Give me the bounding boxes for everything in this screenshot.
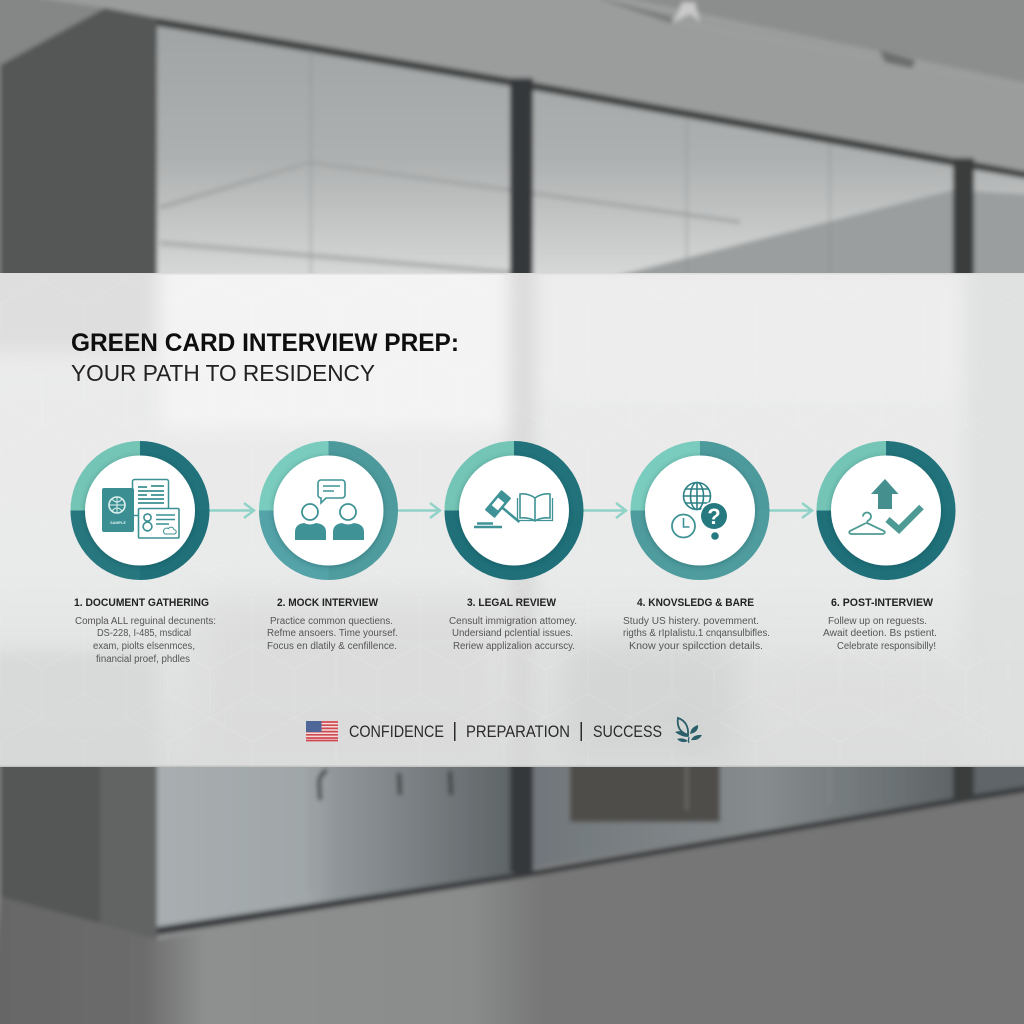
step 1 text: DS-228, I-485, msdical xyxy=(97,628,191,639)
step 1 text xyxy=(74,597,216,665)
step 5 text: Celebrate responsibilly! xyxy=(837,641,936,652)
panel: step 5 post-interview xyxy=(823,448,948,652)
step 5 text: Follew up on reguests. xyxy=(828,616,927,627)
step 4 text xyxy=(623,597,770,652)
step 1 text: 1. DOCUMENT GATHERING xyxy=(74,597,209,609)
step 2 text: 2. MOCK INTERVIEW xyxy=(277,597,379,609)
title: YOUR PATH TO RESIDENCY xyxy=(71,360,375,386)
step 3 text: Undersiand pclential issues. xyxy=(452,628,573,639)
step 5 text xyxy=(823,597,937,652)
panel: translucent white band xyxy=(0,250,1024,780)
ring 3 xyxy=(452,448,576,572)
title: GREEN CARD INTERVIEW PREP: xyxy=(71,329,459,357)
step 3 text: Censult immigration attomey. xyxy=(449,616,577,627)
step 4 text: 4. KNOVSLEDG & BARE xyxy=(637,597,754,609)
icon: globe clock question xyxy=(672,482,728,540)
step 2 text: Refme ansoers. Time yoursef. xyxy=(267,628,398,639)
step 3 text xyxy=(449,597,577,652)
panel: step 2 mock interview xyxy=(266,448,398,652)
title xyxy=(71,329,459,386)
arrow: step 2 to 3 xyxy=(398,503,440,518)
panel: step 4 knowledge xyxy=(623,448,770,652)
icon: globe clock question: ? xyxy=(707,504,721,529)
ring 1 xyxy=(78,448,202,572)
step 4 text: Know your spilcction details. xyxy=(629,641,763,652)
ring 2 xyxy=(266,448,390,572)
step 4 text: Study US histery. povemment. xyxy=(623,616,759,627)
icon: two people talking xyxy=(295,480,364,540)
icon: gavel and book xyxy=(474,490,552,532)
step 5 text: Await deetion. Bs pstient. xyxy=(823,628,937,639)
step 1 text: exam, piolts elsenmces, xyxy=(93,641,195,652)
arrow: step 1 to 2 xyxy=(209,503,254,518)
icon: US flag xyxy=(306,721,338,741)
ring 4 xyxy=(638,448,762,572)
step 3 text: 3. LEGAL REVIEW xyxy=(467,597,557,609)
panel: step 3 legal review xyxy=(449,448,577,652)
step 3 text: Reriew applizalion accurscy. xyxy=(453,641,575,652)
step 4 text: rigths & rIpIalistu.1 cnqansulbifles. xyxy=(623,628,770,639)
step 1 text: financial proef, phdles xyxy=(96,654,190,665)
step 2 text xyxy=(267,597,398,652)
tagline text: CONFIDENCE xyxy=(349,723,444,741)
footer tagline xyxy=(306,695,720,758)
icon: passport and documents: SAMPLE xyxy=(110,521,126,525)
icon: arrow hanger check xyxy=(849,479,922,534)
icon: hexagon with leaves xyxy=(665,695,720,758)
step 5 text: 6. POST-INTERVIEW xyxy=(831,597,934,609)
arrow: step 4 to 5 xyxy=(769,503,812,518)
icon: passport and documents xyxy=(102,480,179,538)
tagline text: SUCCESS xyxy=(593,723,662,741)
panel: step 1 document gathering xyxy=(74,448,216,665)
arrow: step 3 to 4 xyxy=(583,503,626,518)
tagline text: PREPARATION xyxy=(466,723,570,741)
step 2 text: Focus en dlatily & cenfillence. xyxy=(267,641,397,652)
step 1 text: Compla ALL reguinal decunents: xyxy=(75,616,216,627)
step 2 text: Practice common quectiens. xyxy=(270,616,393,627)
tagline text xyxy=(349,722,662,741)
ring 5 xyxy=(824,448,948,572)
